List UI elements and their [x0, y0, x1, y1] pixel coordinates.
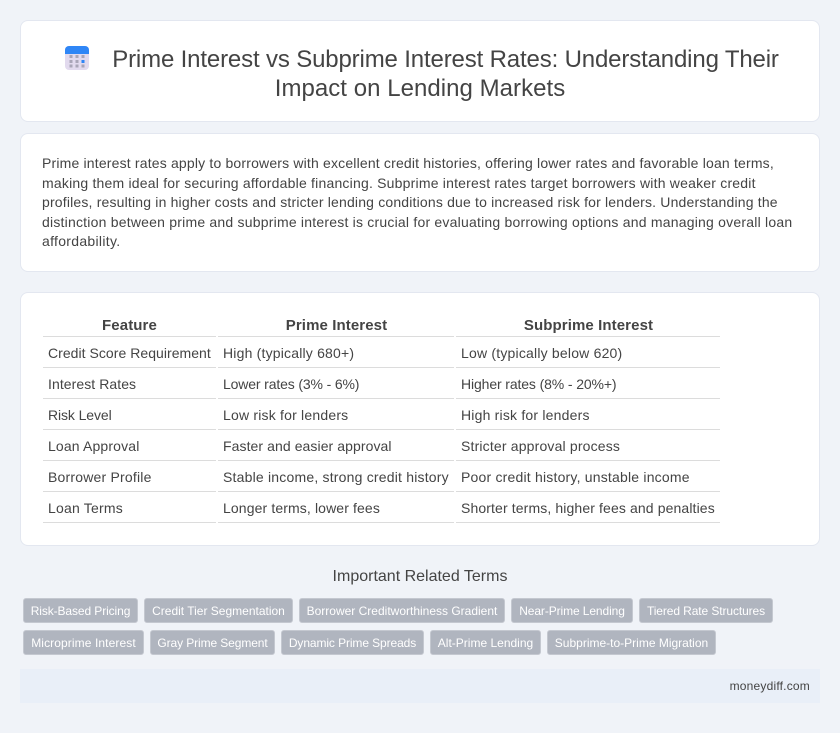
comparison table: Stable income, strong credit history: [223, 469, 449, 485]
comparison table: Prime Interest: [286, 317, 387, 334]
comparison table: Higher rates (8% - 20%+): [461, 376, 616, 392]
related term tags: Borrower Creditworthiness Gradient: [307, 604, 497, 618]
comparison table: Subprime Interest: [524, 317, 653, 334]
description text: making them ideal for securing affordable financing. Subprime interest rates target borrowers with weaker credit: [42, 175, 756, 191]
comparison table: High (typically 680+): [223, 345, 354, 361]
comparison table: Borrower Profile: [48, 469, 152, 485]
table card: [20, 292, 820, 546]
comparison table: [43, 317, 720, 523]
comparison table: Poor credit history, unstable income: [461, 469, 690, 485]
description text: distinction between prime and subprime interest is crucial for evaluating borrowing options and managing overall loan: [42, 214, 792, 230]
related term tags: Credit Tier Segmentation: [152, 604, 285, 618]
title: Prime Interest vs Subprime Interest Rates: Understanding Their: [112, 46, 779, 73]
related term tags: Alt-Prime Lending: [438, 636, 533, 650]
description card: [20, 133, 820, 272]
related term tags: Risk-Based Pricing: [31, 604, 130, 618]
comparison table: Feature: [102, 317, 157, 334]
comparison table: Stricter approval process: [461, 438, 620, 454]
comparison table: Credit Score Requirement: [48, 345, 211, 361]
comparison table: Loan Terms: [48, 500, 123, 516]
comparison table: Low (typically below 620): [461, 345, 622, 361]
title: [112, 46, 779, 102]
comparison table: Shorter terms, higher fees and penalties: [461, 500, 715, 516]
comparison table: Lower rates (3% - 6%): [223, 376, 359, 392]
related term tags: Subprime-to-Prime Migration: [555, 636, 708, 650]
icon: calendar: [65, 46, 89, 70]
footer bar: [20, 669, 820, 703]
comparison table: Faster and easier approval: [223, 438, 392, 454]
related term tags: Tiered Rate Structures: [647, 604, 765, 618]
comparison table: Loan Approval: [48, 438, 139, 454]
comparison table: Low risk for lenders: [223, 407, 348, 423]
description text: Prime interest rates apply to borrowers with excellent credit histories, offering lower rates and favorable loan terms,: [42, 155, 774, 171]
related term tags: Gray Prime Segment: [157, 636, 268, 650]
related terms heading: Important Related Terms: [333, 568, 507, 585]
description text: [42, 155, 792, 249]
related term tags: Dynamic Prime Spreads: [289, 636, 416, 650]
comparison table: Interest Rates: [48, 376, 136, 392]
description text: affordability.: [42, 233, 120, 249]
description text: profiles, resulting in higher costs and stricter lending conditions due to increased risk for lenders. Understanding the: [42, 194, 778, 210]
related term tags: [23, 598, 773, 655]
comparison table: Risk Level: [48, 407, 112, 423]
header card: [20, 20, 820, 122]
footer source label: moneydiff.com: [730, 679, 810, 693]
related term tags: Near-Prime Lending: [519, 604, 625, 618]
comparison table: High risk for lenders: [461, 407, 590, 423]
related term tags: Microprime Interest: [31, 636, 136, 650]
title: Impact on Lending Markets: [275, 75, 565, 102]
comparison table: Longer terms, lower fees: [223, 500, 380, 516]
